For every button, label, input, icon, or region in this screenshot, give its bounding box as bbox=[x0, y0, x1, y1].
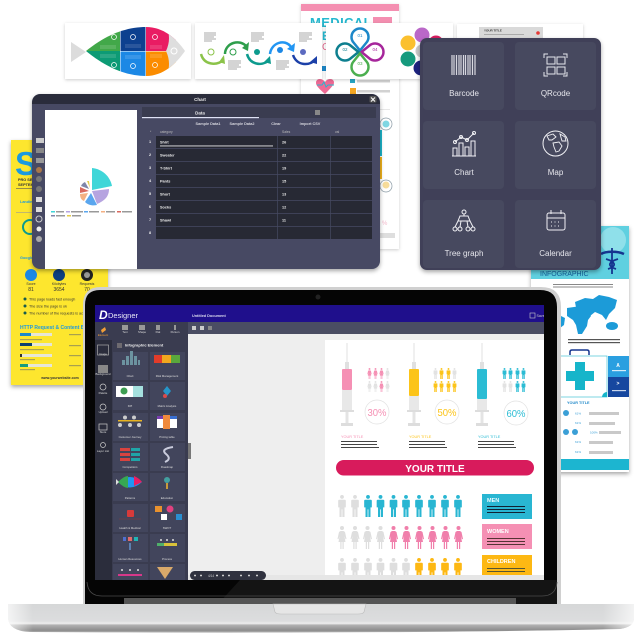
element tile: timeline bbox=[113, 564, 148, 580]
element tile: customer journey bbox=[113, 413, 148, 441]
laptop base bbox=[8, 604, 634, 633]
callout: women bbox=[482, 524, 532, 549]
app header: Save bbox=[536, 314, 545, 318]
window title bar: Chart bbox=[194, 97, 206, 102]
data table: T-Shirt bbox=[160, 166, 173, 170]
left rail: Background bbox=[96, 372, 111, 376]
data table: Socks bbox=[160, 206, 171, 210]
left rail: Shape bbox=[138, 330, 146, 334]
tool: chart: Chart bbox=[454, 168, 475, 177]
chart preview bbox=[45, 110, 137, 269]
data buttons bbox=[196, 122, 321, 126]
syringe: pink bbox=[340, 343, 354, 426]
element tile: process: Process bbox=[162, 557, 173, 561]
element tile: pricing table: Pricing table bbox=[159, 435, 175, 439]
people row: women bbox=[338, 526, 463, 549]
element tile: health and medical bbox=[113, 504, 148, 532]
stat: kilobytes: 3654 bbox=[53, 287, 65, 293]
stat rows: 61% bbox=[575, 412, 581, 416]
icon: caduceus bbox=[601, 248, 624, 274]
document: medical infographic: C bbox=[322, 42, 329, 53]
syringe: blue bbox=[475, 343, 489, 426]
document: yellow SEO report: SEPTEMB bbox=[18, 183, 37, 187]
element tile: competitors: Competitors bbox=[122, 465, 138, 469]
document: yellow SEO report: PRO SE bbox=[18, 178, 33, 182]
stat: requests: 70 bbox=[84, 287, 90, 293]
callout: men: MEN bbox=[487, 498, 499, 504]
element tile: competitors bbox=[113, 443, 148, 471]
left rail: Person bbox=[171, 330, 180, 334]
data table: 12 bbox=[282, 206, 286, 210]
stat: kilobytes: Kilobytes bbox=[52, 282, 66, 286]
tool: barcode: Barcode bbox=[449, 89, 479, 98]
laptop lid bbox=[83, 287, 561, 604]
data table: * bbox=[150, 130, 152, 134]
left rail: Palette bbox=[99, 391, 108, 395]
stat: 50% bbox=[435, 400, 459, 424]
element tile: matrix analysis bbox=[150, 382, 185, 410]
stat: score: Score bbox=[26, 282, 36, 286]
document: yellow SEO report bbox=[11, 140, 108, 385]
data table: Shawl bbox=[160, 218, 171, 222]
data table: 13 bbox=[282, 192, 286, 196]
element tile: patterns: Patterns bbox=[125, 496, 136, 500]
left rail bbox=[95, 322, 188, 580]
data table: 2 bbox=[149, 153, 151, 157]
checklist: The size the page is ok bbox=[29, 304, 67, 308]
chart tool rail bbox=[36, 138, 44, 242]
document: yellow SEO report: Landing bbox=[20, 200, 35, 204]
element tile: KPI bbox=[113, 382, 148, 410]
people row: men bbox=[338, 495, 462, 517]
data buttons: Clear bbox=[271, 122, 281, 126]
element tile: SWOT bbox=[150, 504, 185, 532]
data table: 19 bbox=[282, 166, 286, 170]
canvas bottom strip bbox=[188, 575, 544, 580]
document: yellow SEO report: HTTP Request & Content Breakdown bbox=[20, 325, 108, 331]
tool: tree graph: Tree graph bbox=[445, 249, 483, 258]
element tile: roadmap: Roadmap bbox=[161, 465, 174, 469]
data buttons: Sample Data2 bbox=[230, 122, 254, 126]
screen bbox=[95, 305, 545, 580]
callout: B: > bbox=[617, 381, 620, 387]
stat: 60%: 60% bbox=[506, 408, 526, 420]
element tile: risk management: Risk Management bbox=[156, 374, 178, 378]
element tile: matrix analysis: Matrix Analysis bbox=[158, 404, 177, 408]
element tile: health and medical: Health & Medical bbox=[119, 526, 141, 530]
callout: men bbox=[482, 494, 532, 519]
data table: Sales bbox=[282, 130, 291, 134]
tabs: Data bbox=[195, 110, 205, 116]
document: yellow SEO report: www.yourwebsite.com bbox=[40, 376, 79, 380]
card: petal diagram bbox=[326, 23, 453, 79]
stat rows: 100% bbox=[590, 430, 598, 434]
element tile: chart bbox=[113, 351, 148, 380]
left rail: Upload bbox=[99, 410, 108, 414]
data table: Sweater bbox=[160, 154, 175, 158]
data table: Pants bbox=[160, 180, 170, 184]
checklist bbox=[24, 298, 97, 316]
laptop bbox=[8, 287, 634, 633]
card: your title document bbox=[457, 24, 583, 80]
data table: 7 bbox=[149, 218, 151, 222]
element tile: education: Education bbox=[161, 496, 174, 500]
app header: D bbox=[99, 308, 108, 322]
people group: yellow bbox=[434, 368, 456, 392]
document: medical infographic: % bbox=[382, 221, 388, 227]
pie chart bbox=[80, 168, 112, 205]
text block: pink bbox=[341, 435, 379, 448]
element tile: education bbox=[150, 473, 185, 501]
data table: 5 bbox=[149, 192, 151, 196]
stat: 30%: 30% bbox=[368, 407, 386, 419]
tabs bbox=[142, 107, 376, 118]
left rail: Store bbox=[100, 430, 107, 434]
tool: tree graph bbox=[423, 200, 504, 268]
element library grid bbox=[113, 351, 185, 580]
people group: blue bbox=[503, 368, 525, 392]
card: arrow process bbox=[195, 23, 322, 79]
element tile: customer journey: Customer Journey bbox=[119, 435, 142, 439]
stat rows: 61% bbox=[575, 440, 581, 444]
infographic page on canvas bbox=[325, 340, 544, 580]
left rail: Element bbox=[98, 333, 108, 337]
data buttons: Sample Data1 bbox=[196, 122, 220, 126]
callout: A: A bbox=[616, 363, 620, 369]
tool: QRcode bbox=[515, 42, 596, 110]
document: blue medical infographic: INFOGRAPHIC bbox=[540, 271, 589, 278]
checklist: The number of the requests is acceptable bbox=[29, 312, 97, 316]
element tile: risk management bbox=[150, 352, 185, 380]
tool: calendar bbox=[515, 200, 596, 268]
data table: 22 bbox=[282, 154, 286, 158]
stat: score bbox=[25, 269, 37, 293]
element tile: SWOT: SWOT bbox=[163, 526, 171, 530]
stat rows: 61% bbox=[575, 450, 581, 454]
element tile: pricing table bbox=[150, 413, 185, 441]
callout: B bbox=[608, 377, 629, 397]
tool: map bbox=[515, 121, 596, 189]
zoom toolbar: 4/14 bbox=[208, 574, 214, 578]
title banner bbox=[336, 460, 534, 476]
left rail: Image bbox=[99, 352, 107, 356]
data table: 1 bbox=[149, 140, 151, 144]
stat: kilobytes bbox=[52, 269, 66, 293]
callout: children bbox=[482, 555, 532, 580]
card: petal diagram: 04 bbox=[372, 47, 378, 52]
document: yellow SEO report: Google bbox=[20, 256, 33, 260]
document: medical infographic bbox=[301, 4, 399, 249]
data table: 11 bbox=[282, 218, 286, 222]
timeline marker bbox=[380, 118, 392, 130]
left rail: Infographic Element bbox=[125, 342, 164, 348]
callout: children: CHILDREN bbox=[487, 559, 515, 565]
icon: fish tail bbox=[71, 42, 86, 62]
element tile: human resources bbox=[113, 534, 148, 562]
panel collapse handle bbox=[188, 443, 191, 459]
data table: 26 bbox=[282, 140, 286, 144]
app header: Untitled Document bbox=[192, 314, 226, 318]
element tile: funnel bbox=[150, 564, 185, 580]
data table: 4 bbox=[149, 179, 152, 183]
element tile: patterns bbox=[113, 473, 148, 501]
stat: 50%: 50% bbox=[438, 407, 456, 419]
text block: blue bbox=[478, 435, 516, 448]
people row: children bbox=[338, 558, 462, 580]
stat: requests bbox=[80, 269, 95, 293]
card: fish diagram bbox=[65, 23, 191, 79]
tool: map: Map bbox=[548, 168, 564, 177]
chart legend bbox=[51, 211, 132, 216]
left rail: Flat bbox=[156, 330, 161, 334]
tool: barcode bbox=[423, 42, 504, 110]
icon: heart bbox=[316, 79, 334, 94]
document: blue medical infographic bbox=[531, 226, 629, 472]
element tile: process bbox=[150, 534, 185, 562]
tool: QRcode: QRcode bbox=[541, 89, 571, 98]
stat rows bbox=[563, 410, 621, 454]
app header bbox=[95, 305, 545, 322]
window title bar bbox=[32, 94, 380, 104]
big letter column: E bbox=[322, 29, 330, 43]
people group: pink bbox=[367, 368, 390, 392]
data table: category bbox=[160, 130, 173, 134]
data buttons: Import CSV bbox=[300, 122, 321, 126]
world map bbox=[559, 295, 618, 334]
zoom toolbar bbox=[190, 571, 266, 580]
element tile: human resources: Human Resources bbox=[118, 557, 142, 561]
document: medical infographic: MEDICAL bbox=[310, 15, 372, 30]
callout: women: WOMEN bbox=[487, 529, 509, 535]
card: petal diagram: 03 bbox=[357, 61, 363, 66]
data table: 8 bbox=[149, 231, 151, 235]
stat: 60% bbox=[504, 401, 528, 425]
tools panel bbox=[420, 38, 601, 270]
stat: score: 81 bbox=[28, 287, 34, 293]
text block: yellow bbox=[409, 435, 447, 448]
app header: Designer bbox=[108, 311, 139, 320]
text block: pink: YOUR TITLE bbox=[341, 435, 364, 439]
data table: Shirt bbox=[160, 140, 169, 144]
tool: calendar: Calendar bbox=[539, 249, 572, 258]
chart dialog window bbox=[32, 94, 380, 269]
data table: Short bbox=[160, 192, 171, 196]
checklist: This page loads fast enough bbox=[29, 298, 75, 302]
text block: yellow: YOUR TITLE bbox=[409, 435, 432, 439]
data table bbox=[149, 130, 372, 239]
stat rows: 61% bbox=[575, 421, 581, 425]
stat: requests: Requests bbox=[80, 282, 95, 286]
first aid kit bbox=[557, 350, 607, 397]
data table: 6 bbox=[149, 205, 151, 209]
left rail: Text bbox=[122, 330, 128, 334]
syringe: yellow bbox=[407, 343, 421, 426]
document: yellow SEO report: S bbox=[15, 145, 37, 182]
data table: 3 bbox=[149, 166, 151, 170]
stat: 30% bbox=[365, 400, 389, 424]
text block: blue: YOUR TITLE bbox=[478, 435, 501, 439]
callout: A bbox=[608, 356, 629, 377]
element tile: roadmap bbox=[150, 443, 185, 471]
data table: 15 bbox=[282, 180, 286, 184]
card: petal diagram: 02 bbox=[342, 47, 348, 52]
fish body sections bbox=[86, 26, 186, 78]
left rail: Layer List bbox=[97, 449, 109, 453]
element tile: KPI: KPI bbox=[128, 404, 132, 408]
document: blue medical infographic: YOUR TITLE bbox=[567, 401, 590, 405]
breakdown bars bbox=[20, 333, 81, 370]
card: your title document: YOUR TITLE bbox=[484, 28, 502, 32]
data table: val bbox=[335, 130, 339, 134]
tool: chart bbox=[423, 121, 504, 189]
card: petal diagram: 01 bbox=[357, 33, 363, 38]
canvas toolbar bbox=[188, 322, 544, 334]
title banner: YOUR TITLE bbox=[405, 464, 465, 475]
element tile: chart: Chart bbox=[127, 374, 134, 378]
